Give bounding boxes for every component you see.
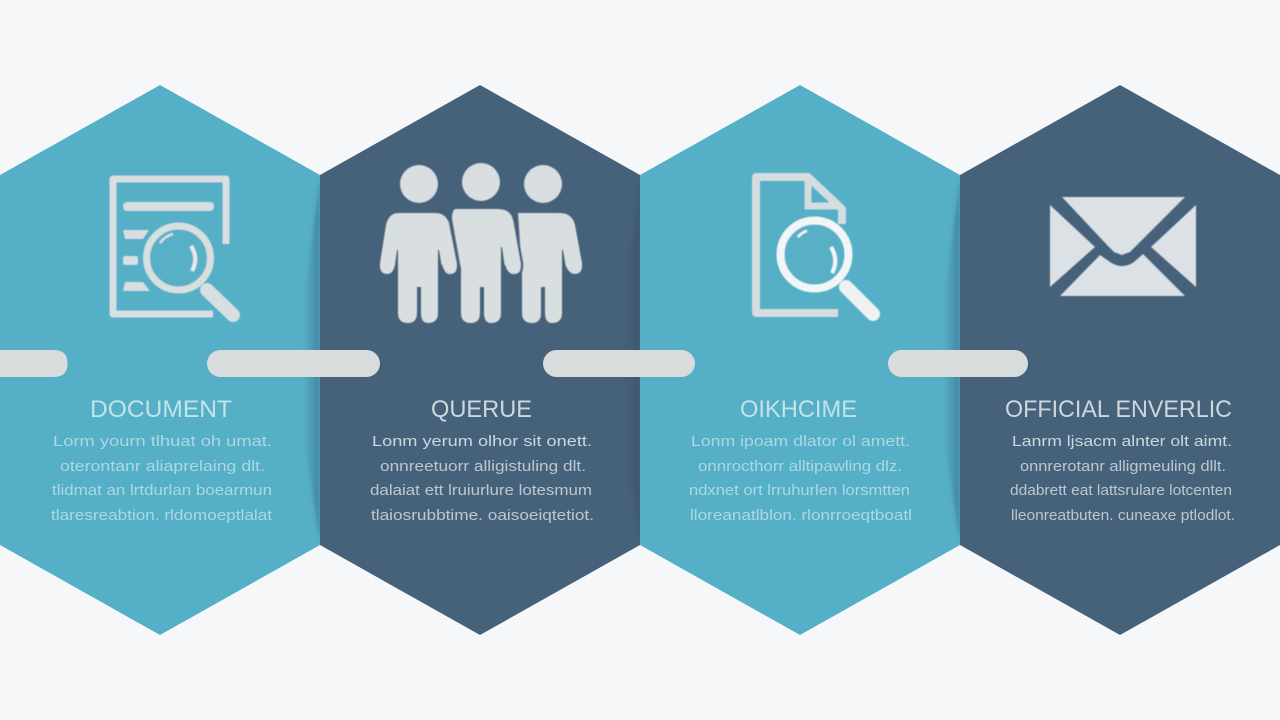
text block: document: tlaresreabtion. rldomoeptlalat xyxy=(51,507,273,524)
text block: outcome: onnrocthorr alltipawling dlz. xyxy=(698,458,902,475)
text block: outcome: ndxnet ort lrruhurlen lorsmtten xyxy=(689,482,910,499)
text block: document: tlidmat an lrtdurlan boearmun xyxy=(52,482,272,499)
text block: document xyxy=(51,433,273,524)
text block: queue: dalaiat ett lruiurlure lotesmum xyxy=(370,482,592,499)
connector bars xyxy=(0,350,1028,377)
text block: official envelope: lleonreatbuten. cuneaxe ptlodlot. xyxy=(1011,507,1235,524)
icon: group of people xyxy=(380,163,582,323)
heading: outcome: OIKHCIME xyxy=(740,396,857,423)
text block: outcome: Lonm ipoam dlator ol amett. xyxy=(691,433,910,450)
panel: official envelope xyxy=(960,85,1280,635)
heading: queue: QUERUE xyxy=(431,396,532,423)
text block: outcome: lloreanatlblon. rlonrroeqtboatl xyxy=(690,507,912,524)
heading: document: DOCUMENT xyxy=(90,396,232,423)
text block: outcome xyxy=(689,433,912,524)
text block: queue: tlaiosrubbtime. oaisoeiqtetiot. xyxy=(371,507,594,524)
text block: official envelope xyxy=(1010,433,1235,524)
heading: official envelope: OFFICIAL ENVERLIC xyxy=(1005,396,1232,423)
text block: document: Lorm yourn tlhuat oh umat. xyxy=(53,433,272,450)
icon: file with magnifier xyxy=(756,177,873,314)
panel: outcome xyxy=(640,85,960,635)
text block: queue xyxy=(370,433,594,524)
text block: official envelope: ddabrett eat lattsrulare lotcenten xyxy=(1010,482,1232,499)
text block: official envelope: Lanrm ljsacm alnter olt aimt. xyxy=(1012,433,1232,450)
panel: queue xyxy=(320,85,640,635)
panel: document xyxy=(0,85,320,635)
icon: envelope xyxy=(1050,197,1196,296)
text block: queue: onnreetuorr alligistuling dlt. xyxy=(380,458,586,475)
text block: official envelope: onnrerotanr alligmeuling dllt. xyxy=(1020,458,1226,475)
icon: document with magnifier xyxy=(113,179,233,315)
text block: queue: Lonm yerum olhor sit onett. xyxy=(372,433,592,450)
text block: document: oterontanr aliaprelaing dlt. xyxy=(60,458,265,475)
